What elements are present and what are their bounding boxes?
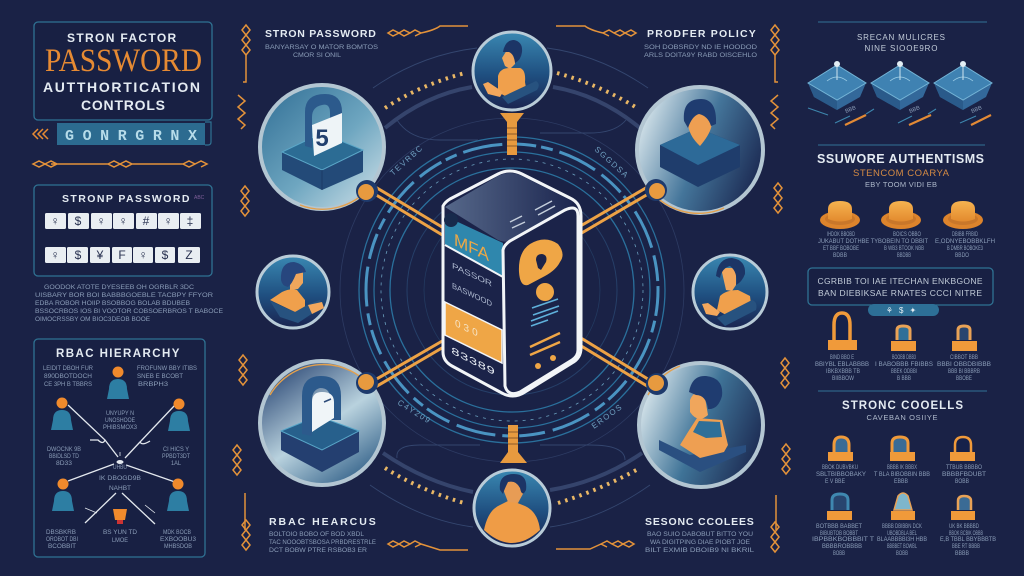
padlock captions 3 (812, 523, 996, 557)
token captions: B DMBR BOBOKE3 (947, 245, 983, 252)
panel: title (34, 22, 212, 120)
icon: head on block (660, 99, 740, 187)
white separator (445, 245, 503, 277)
panel: RBAC hierarchy (34, 339, 205, 557)
hierarchy links (68, 405, 175, 524)
text block: password notes: BSSOCRBOS IOS BI VOOTOR COBSOERBROS T BABOCE (35, 308, 224, 315)
padlock captions 2: SBLTBIBBOBAKY (816, 471, 867, 478)
icon: person right (702, 258, 756, 326)
role labels: DWOCNK 9B (47, 446, 81, 453)
role labels: MHBSDOB (164, 543, 192, 550)
circle: RBAC padlock (260, 361, 384, 485)
MFA teal band (444, 213, 503, 276)
MFA server device (443, 171, 581, 396)
icon: person at desk (659, 376, 746, 472)
password cells row 2 (45, 247, 200, 263)
padlock captions 3: BLAABBBBI3H HBB (877, 536, 927, 543)
token captions: BBDO (955, 252, 969, 259)
role labels: PHIBSMOX3 (103, 424, 137, 431)
panel: strong password (34, 185, 212, 276)
right column: authentications section (817, 145, 995, 259)
icon row: isometric boxes (808, 61, 992, 110)
orange band (445, 302, 502, 363)
panel: RBAC hierarchy: RBAC HIERARCHY (56, 348, 180, 360)
panel: callout: BAN DIEBIKSAE RNATES CCCI NITRE (818, 288, 982, 298)
padlock captions 2: EBBB (894, 478, 908, 485)
token captions (818, 231, 995, 259)
padlock captions 1: BBBI OBBDBIBBB (937, 361, 991, 368)
role labels: BS YUN TD (103, 529, 137, 536)
heading: strong password (265, 26, 468, 59)
circle: left mid figure (257, 256, 329, 328)
token captions: E,ODNYEBOBBKLFH (935, 238, 995, 245)
connector stems top and bottom (500, 113, 527, 463)
section: strong controls (818, 391, 987, 422)
role labels (43, 365, 198, 550)
padlock captions 3: BOBB (896, 550, 908, 557)
right column: authentications section: EBY TOOM VIDI EB (865, 180, 937, 189)
role labels: FROFUNW BBY ITIBS (137, 365, 198, 372)
title text: CONTROLS (81, 97, 165, 113)
panel: callout (808, 268, 993, 316)
pill icons: ⚘$✦ (886, 306, 922, 315)
role labels: DBSBKRB (46, 529, 76, 536)
right column: authentications section: SSUWORE AUTHENTISMS (817, 152, 984, 166)
token domes (820, 201, 983, 229)
padlock captions 2: BBOK DUBVBKU (822, 464, 858, 471)
heading: proper policy: ARLS DOITA9Y RABD OISCEHLO (644, 52, 757, 59)
lock badge (519, 240, 563, 285)
padlock captions 2: T BLA BIBOBBIN BBB (874, 471, 930, 478)
role labels: BBIDLSD TD (49, 453, 79, 460)
box captions and strokes: BBB (845, 105, 857, 115)
connector knobs (356, 179, 668, 395)
right column: secure boxes section (808, 22, 992, 125)
role labels: BRBPH3 (138, 381, 168, 388)
heading: RBAC hearcus: BOLTOIO BOBO OF BOD XBDL (269, 531, 364, 538)
padlock captions 2: BBBB IK BBBX (887, 464, 917, 471)
orbit swooshes and thin guide lines (370, 48, 650, 527)
panel: callout: CGRBIB TOI IAE ITECHAN ENKBGONE (818, 276, 983, 286)
padlock captions 2: E V BBE (825, 478, 846, 485)
decorative chains around center (233, 25, 790, 552)
title text: STRON FACTOR (67, 31, 177, 45)
right column: secure boxes section: SRECAN MULICRES (857, 33, 945, 42)
password cells row 1: $ (75, 214, 82, 228)
MFA teal band: MFA (454, 230, 489, 265)
circle: strong password padlock (260, 85, 384, 209)
orange band: 030 (455, 317, 481, 341)
password cells row 1 (45, 213, 201, 229)
password cells row 2: $ (162, 248, 169, 262)
heading: proper policy (556, 26, 757, 59)
padlock captions 2 (816, 464, 986, 485)
password cells row 1: ♀ (96, 214, 106, 228)
password cells row 1: ‡ (187, 214, 193, 228)
padlock captions 2: BOBB (955, 478, 969, 485)
orange dotted character strings (385, 73, 640, 503)
padlock captions 3: BBOK BCBIK OBBB (949, 530, 983, 537)
text block: password notes: GOODOK ATOTE DYESEEB OH OGRBLR 3DC (44, 284, 194, 291)
heading: RBAC hearcus: RBAC HEARCUS (269, 516, 377, 528)
banner (57, 122, 211, 145)
role labels: OROBOT DBI (46, 536, 78, 543)
role labels: MDK BOCB (163, 529, 191, 536)
top face (445, 173, 572, 242)
padlock captions 3: BBBBET BOWBL (887, 543, 917, 550)
heading: secure roles: SESONC CCOLEES (645, 516, 755, 528)
ring micro labels: TEVRBC (388, 143, 425, 177)
heading: strong password: CMOR SI ONIL (293, 52, 341, 59)
decorative orange divider (33, 161, 207, 167)
padlock captions 3: BBBBROBBBB (822, 543, 862, 550)
padlock captions 1: BIIBBOW (832, 375, 855, 382)
password cells row 2: $ (75, 248, 82, 262)
panel: strong password: STRONP PASSWORD (62, 193, 190, 205)
padlock captions 3: BBBB DBIBBN DCK (882, 523, 922, 530)
padlock captions 2: BBBBFBDUBT (942, 471, 986, 478)
token captions: BOBEIN TO DBBIT (878, 238, 928, 245)
padlock captions 3: BBBB (955, 550, 969, 557)
padlock captions 3: UBOBDBLA BEL (887, 530, 917, 537)
circle: right mid figure (693, 255, 767, 329)
orange disc (536, 283, 554, 301)
heading: proper policy: PRODFER POLICY (647, 28, 757, 40)
token captions: BOICS OBBO (893, 231, 921, 238)
token captions: IHDOK BBOBD (827, 231, 855, 238)
token captions: B WB3 BTOOK NBB (884, 245, 924, 252)
text block: password notes: EDBA ROBOR HOIIP BSOBBOG BOLAB BDUBEB (35, 300, 190, 307)
role labels: CE 3PH B TBBRS (44, 381, 93, 388)
padlock captions 1: BBOBE (956, 375, 972, 382)
password cells row 2: ¥ (96, 248, 104, 262)
circle: proper policy figure (637, 87, 763, 213)
role labels: UNOSHOOE (105, 417, 136, 424)
padlock captions 1: BBB BI BBBRB (948, 368, 980, 375)
central radial rings diagram (340, 118, 684, 462)
icon: padlock arch on block (281, 376, 359, 472)
right column: secure boxes section: NINE SIOOE9RO (864, 44, 938, 53)
box captions and strokes: BBB (971, 105, 983, 115)
icon: seated person (483, 40, 539, 104)
password cells row 1: ♀ (164, 214, 172, 228)
heading: secure roles: BAO SUIO DABOBUT BITTO YOU (647, 531, 753, 538)
section: strong controls: STRONC COOELLS (842, 400, 963, 412)
heading: strong password: BANYARSAY O MATOR BOMTOS (265, 44, 379, 51)
password cells row 2: ♀ (138, 248, 148, 262)
top face marks (510, 201, 555, 228)
banner: GONRGRNX (65, 128, 197, 145)
title text (43, 31, 202, 113)
role labels: CI HICS Y (163, 446, 190, 453)
section: strong controls: CAVEBAN OSIIYE (866, 413, 938, 422)
icon row: padlocks 2 (828, 437, 975, 461)
role icons (51, 366, 190, 524)
heading: proper policy: SOH DOBSRDY ND IE HOODOD (644, 44, 757, 51)
password labels: BASWOOD (452, 280, 492, 309)
role labels: LEIDIT DBOH FUR (43, 365, 93, 372)
text block: password notes (35, 284, 224, 323)
token captions: DBIBB FRBID (952, 231, 978, 238)
password labels (452, 260, 492, 309)
password labels: PASSOR (452, 260, 492, 289)
icon row: padlocks 1 (828, 313, 977, 351)
orange dots (535, 355, 556, 369)
password cells row 2: F (118, 248, 126, 262)
box captions and strokes (808, 105, 991, 125)
padlock captions 3: BBE RT BBBB (952, 543, 980, 550)
front panel (503, 208, 578, 394)
padlock captions 2: TTBUB BBBBO (946, 464, 982, 471)
token captions: BDBB (833, 252, 847, 259)
padlock captions 1 (815, 354, 991, 382)
padlock captions 1: I BABOBBB FBIBBS (875, 361, 934, 368)
padlock captions 3: E,B TBBL BBYBBBTB (940, 536, 996, 543)
code digits: 83389 (451, 345, 495, 379)
role labels: 890DBOTDOCH (44, 373, 92, 380)
password cells row 1: # (143, 214, 150, 228)
orange lines (530, 333, 560, 355)
text block: password notes: UISBARY BOR BOI BABBBGOEBLE TACBPY FFYOR (35, 292, 213, 299)
heading: secure roles (556, 516, 755, 554)
box captions and strokes: BBB (909, 105, 921, 115)
padlock captions 3: BOTBBB BABBET (816, 523, 862, 530)
icon: person left (270, 262, 324, 323)
padlock captions 1: B BBB (897, 375, 911, 382)
padlock captions 1: IBKBXBBB TB (826, 368, 860, 375)
text block: password notes: OIMOCRSSBY OM BIOC3DEOB BOOE (35, 316, 151, 323)
ring micro labels: C4Y209 (396, 398, 433, 426)
heading: secure roles: BILT EXMIB DBOIB9 NI BKRIL (645, 547, 754, 554)
password cells row 2: Z (185, 248, 193, 262)
padlock captions 1: BBIYBL EBLABBBB (815, 361, 869, 368)
padlock captions 3: BIBUBTOB BOBBT (820, 530, 858, 537)
title text: PASSWORD (45, 43, 202, 79)
token captions: ET BBF BOBOBE (823, 245, 859, 252)
role labels: SNEB E BCOBT (137, 373, 183, 380)
role labels: UHBU (113, 464, 127, 471)
padlock captions 3: UK BK BBBBD (949, 523, 979, 530)
padlock captions 1: CIBBOT BBB (950, 354, 978, 361)
role labels: LMOE (112, 537, 129, 544)
padlock captions 3: IBPBBKBOBBBIT T (812, 536, 874, 543)
role labels: 1AL (171, 460, 181, 467)
role labels: UNYUPY N (106, 410, 134, 417)
icon row: padlocks 3 (827, 493, 975, 520)
icon: orange shirt person (484, 474, 540, 543)
role labels: BCOBBIT (48, 543, 76, 550)
token captions: BBDBB (897, 252, 911, 259)
password cells row 1: ♀ (50, 214, 60, 228)
padlock captions 1: BIND BBO E (830, 354, 854, 361)
right column: authentications section: STENCOM COARYA (853, 168, 950, 179)
password cells row 2: ♀ (50, 248, 60, 262)
padlock captions 3: BOBB (833, 550, 845, 557)
ring micro labels: EROOS (590, 402, 625, 431)
heading: RBAC hearcus (269, 516, 468, 554)
padlock captions 1: BBEK ODBBI (891, 368, 917, 375)
role labels: 8D33 (56, 460, 72, 467)
heading: RBAC hearcus: TAC NOOOBTSBOSA PRBDRESTRLE (269, 539, 377, 546)
role labels: EXBOOBU3 (160, 536, 196, 543)
pill icons (868, 304, 939, 316)
token captions: JUKABUT DOTHBE TY (818, 238, 879, 245)
icon: chevrons (33, 129, 48, 139)
heading: secure roles: WA DIGITPING DIAE PIOBT JOE (650, 539, 751, 546)
padlock captions 1: BOOBB DBB3 (892, 354, 916, 361)
role labels: PPBDT3DT (162, 453, 190, 460)
circle: bottom figure (474, 470, 550, 546)
title text: AUTTHORTICATION (43, 79, 200, 95)
ring micro labels: SGGDSA (593, 145, 631, 180)
password cells row 1: ♀ (118, 214, 128, 228)
icon: padlock on block: 5 (315, 125, 329, 152)
circle: top figure (473, 32, 551, 110)
blue lines (531, 299, 559, 326)
heading: strong password: STRON PASSWORD (265, 28, 377, 40)
role labels: NAHBT (109, 485, 131, 492)
server body (443, 171, 581, 396)
heading: RBAC hearcus: DCT BOBW PTRE RSBOB3 ER (269, 547, 367, 554)
panel: strong password: ABC (194, 195, 205, 201)
connectors: circles to MFA server (368, 185, 656, 389)
circle: secure roles figure (639, 363, 763, 487)
role labels: IK DBOGD9B (99, 475, 141, 482)
ring micro labels (388, 143, 631, 431)
